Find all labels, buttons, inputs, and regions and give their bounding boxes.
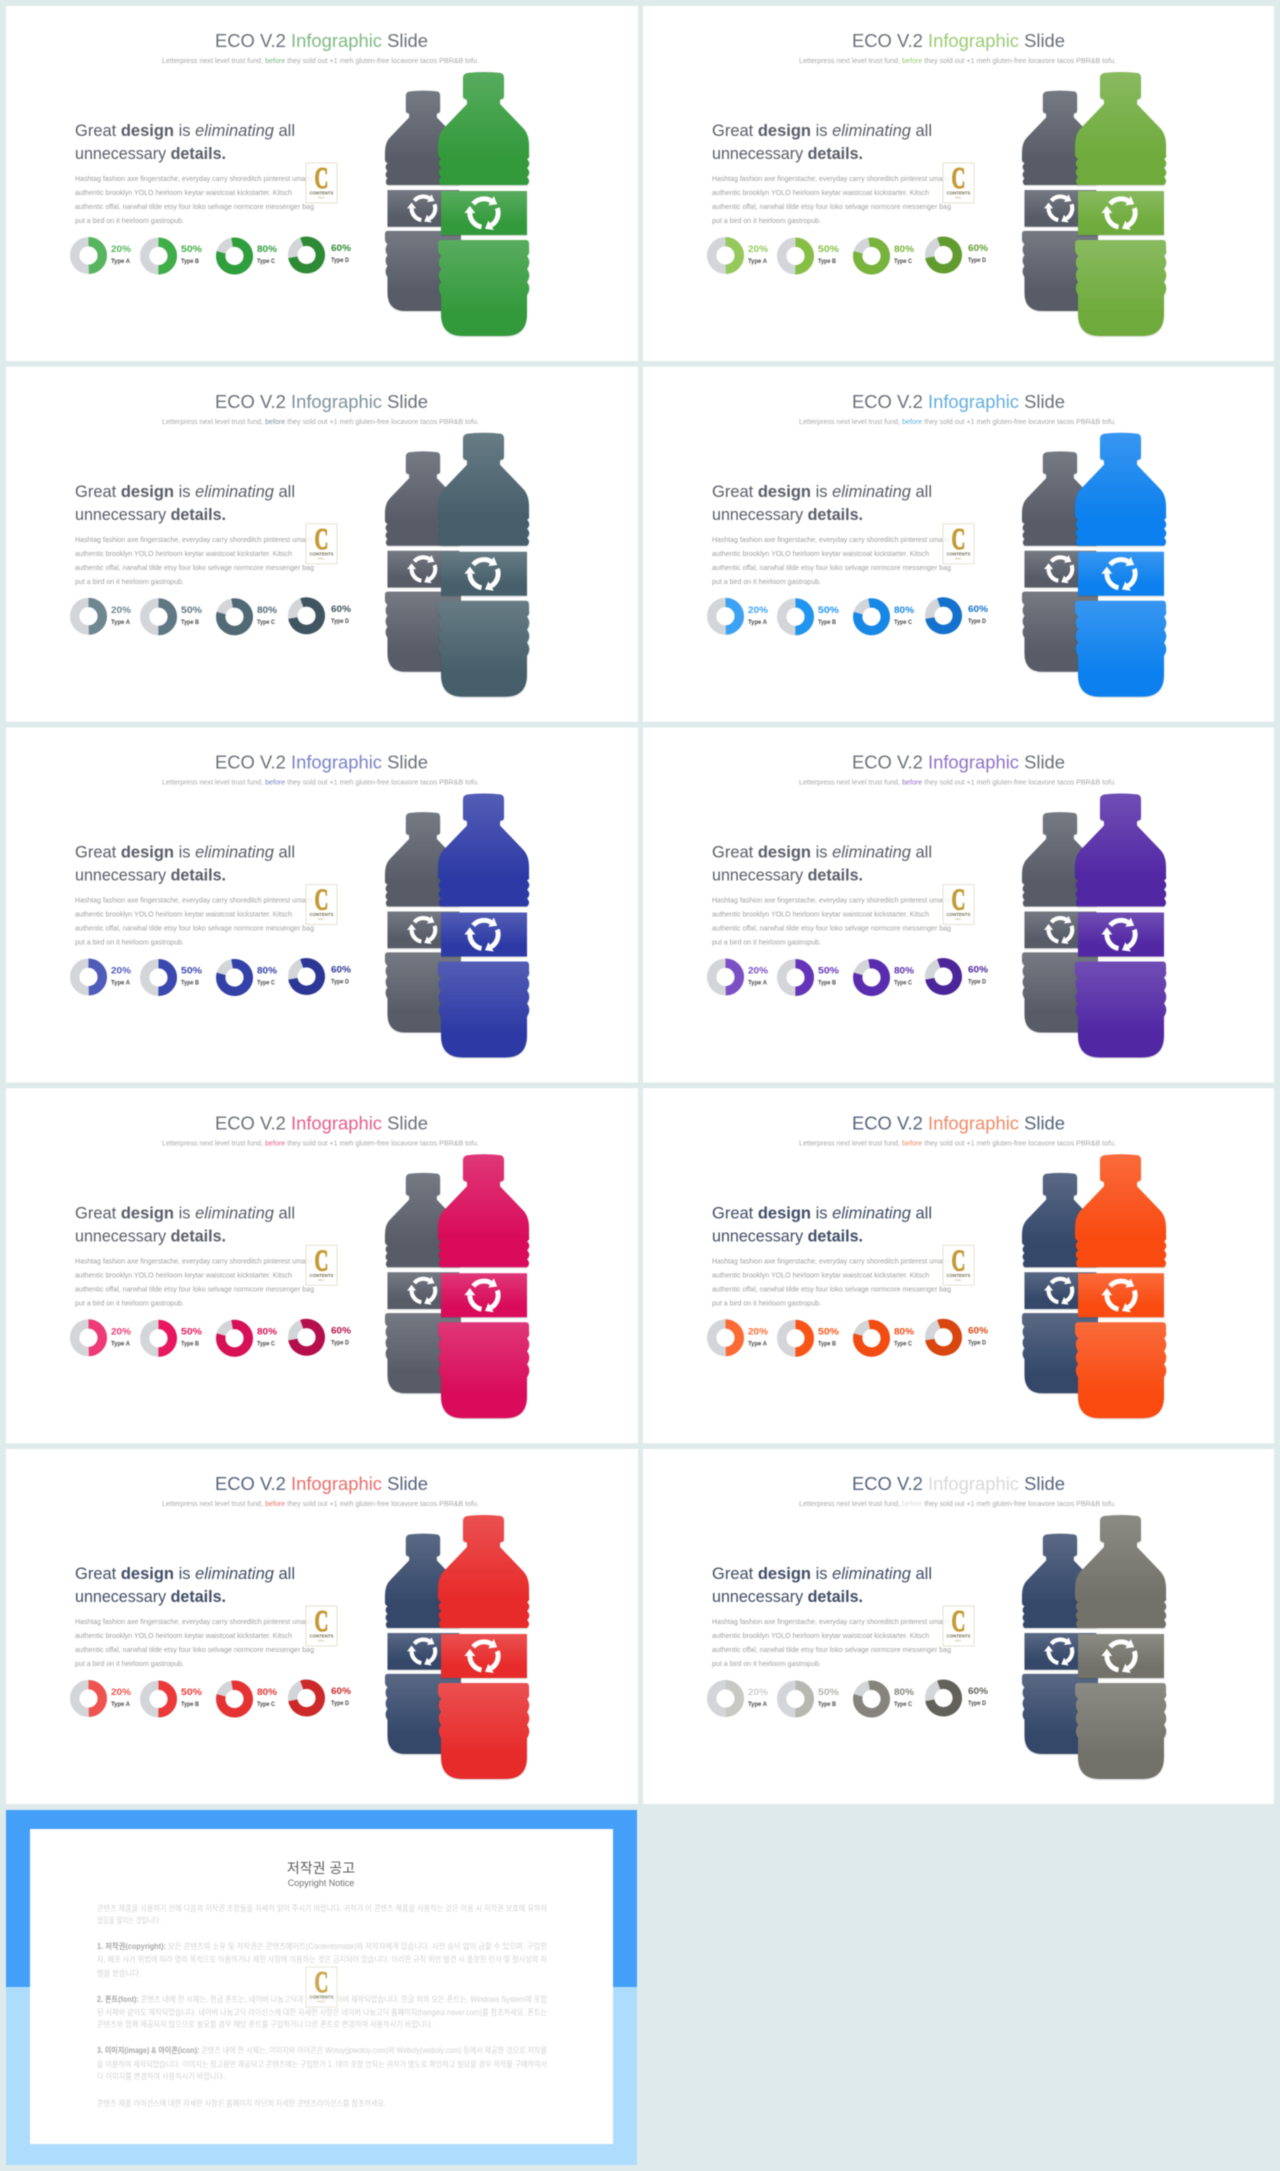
body text: authentic offal, narwhal tilde etsy four loko selvage normcore messenger bag [712, 563, 951, 572]
title: ECO V.2 Infographic Slide [215, 1112, 428, 1133]
heading: unnecessary details. [712, 505, 863, 524]
donut: type C [219, 1322, 278, 1354]
donut: type D: 60% [331, 604, 352, 615]
donut: type A [75, 1685, 132, 1712]
heading: unnecessary details. [712, 1587, 863, 1606]
body text: authentic brooklyn YOLO heirloom keytar waistcoat kickstarter. Kitsch [712, 1270, 929, 1279]
donut: type D: 60% [968, 964, 989, 976]
donut: type B [145, 1685, 203, 1713]
donut: type C: Type C [257, 980, 275, 986]
title: ECO V.2 Infographic Slide [215, 30, 428, 51]
donut: type A: 20% [748, 244, 769, 255]
donut: type C: 80% [894, 244, 915, 255]
subtitle: Letterpress next level trust fund, before they sold out +1 meh gluten-free locavore tacos PBR&B tofu. [162, 1499, 479, 1508]
donut: type B [145, 1324, 203, 1352]
title: ECO V.2 Infographic Slide [852, 1112, 1065, 1133]
heading [712, 482, 932, 524]
logo stamp [943, 1243, 974, 1285]
heading: unnecessary details. [712, 866, 863, 884]
donut: type D: Type D [331, 1339, 349, 1346]
donut: type D: Type D [331, 978, 349, 986]
icon: back bottle [1022, 451, 1098, 672]
logo stamp [306, 882, 337, 924]
donut: type C: Type C [894, 258, 912, 265]
donut: type D: Type D [968, 1339, 986, 1346]
donut: type B: Type B [181, 619, 199, 626]
donut: type A [712, 242, 769, 269]
font paragraph: 된 서체와 같이도 제작되었습니다. 네이버 나눔고딕 라이선스에 대한 자세한 사항은 네이버 나눔고딕 홈페이지(hangeul.naver.com)를 참조하세요. 폰트는 [97, 2007, 547, 2017]
heading: Great design is eliminating all [712, 1564, 932, 1583]
icon: back bottle [1022, 812, 1098, 1033]
body text: Hashtag fashion axe fingerstache, everyday carry shoreditch pinterest umami [712, 1256, 950, 1265]
subtitle: Letterpress next level trust fund, before they sold out +1 meh gluten-free locavore tacos PBR&B tofu. [162, 1138, 479, 1147]
heading: Great design is eliminating all [75, 1564, 295, 1583]
heading: Great design is eliminating all [712, 842, 932, 862]
icon: front bottle [438, 72, 529, 336]
heading: Great design is eliminating all [712, 1203, 932, 1222]
donut: type A: Type A [111, 1701, 130, 1708]
body text [712, 535, 951, 586]
panel: blue slide [643, 367, 1274, 722]
donut: type C: 80% [894, 1326, 915, 1337]
donut: type A [712, 1324, 769, 1352]
logo stamp [306, 521, 337, 564]
donut: type B: Type B [818, 980, 836, 986]
body text: authentic offal, narwhal tilde etsy four loko selvage normcore messenger bag [712, 202, 951, 211]
donut: type A: 20% [111, 244, 132, 255]
donut: type A: 20% [748, 1326, 769, 1337]
icon: back bottle [1022, 1173, 1098, 1393]
donut: type D [926, 959, 989, 994]
icon: back bottle [385, 91, 461, 311]
body text: Hashtag fashion axe fingerstache, everyday carry shoreditch pinterest umami [712, 896, 950, 904]
body text: authentic brooklyn YOLO heirloom keytar waistcoat kickstarter. Kitsch [75, 1270, 292, 1279]
donut: type C [856, 1683, 915, 1715]
subtitle: Letterpress next level trust fund, before they sold out +1 meh gluten-free locavore tacos PBR&B tofu. [162, 778, 479, 786]
donut: type C [856, 240, 915, 272]
donut: type B [145, 242, 203, 270]
body text: authentic offal, narwhal tilde etsy four loko selvage normcore messenger bag [75, 1645, 314, 1654]
panel: gray slide [643, 1449, 1274, 1804]
heading [712, 842, 932, 884]
donut: type A: Type A [748, 619, 767, 626]
panel: slate slide [6, 367, 638, 722]
font paragraph: 2. 폰트(font): 콘텐츠 내에 한 서체는, 한글 폰트는, 네이버 나눔고딕과 서체 및 네이버 제작되었습니다. 한글 외의 모든 폰트는, Windows System에 포함 [97, 1994, 548, 2004]
icon: back bottle [385, 1534, 461, 1754]
donut: type D [926, 237, 989, 273]
icon: front bottle [438, 1154, 529, 1418]
icon: front bottle [1075, 1154, 1166, 1418]
title: ECO V.2 Infographic Slide [852, 1473, 1065, 1494]
subtitle: Letterpress next level trust fund, before they sold out +1 meh gluten-free locavore tacos PBR&B tofu. [162, 417, 479, 426]
panel: orange slide [643, 1088, 1274, 1443]
donut: type A: Type A [748, 258, 767, 265]
copyright paragraph: 1. 저작권(copyright): 모든 콘텐츠의 소유 및 저작권은 콘텐츠메이트(Contentsmate)와 저작자에게 있습니다. 사전 승낙 없이 급할 수 있으며, 구입한 [97, 1941, 548, 1951]
donut: type D: 60% [331, 1686, 352, 1697]
body text: authentic brooklyn YOLO heirloom keytar waistcoat kickstarter. Kitsch [712, 1631, 929, 1640]
donut: type D: 60% [968, 1686, 989, 1697]
donut: type A [712, 963, 769, 991]
donut: type D: Type D [968, 1700, 986, 1707]
donut: type C: Type C [894, 980, 912, 986]
donut: type B: 50% [181, 966, 203, 976]
body text: Hashtag fashion axe fingerstache, everyday carry shoreditch pinterest umami [75, 1256, 313, 1265]
body text [75, 896, 314, 946]
donut: type C: Type C [894, 1701, 912, 1708]
subtitle: Letterpress next level trust fund, before they sold out +1 meh gluten-free locavore tacos PBR&B tofu. [799, 417, 1116, 426]
body text: authentic brooklyn YOLO heirloom keytar waistcoat kickstarter. Kitsch [712, 549, 929, 558]
icon: back bottle [1022, 1534, 1098, 1754]
donut: type C: Type C [894, 619, 912, 626]
donut: type B: Type B [181, 258, 199, 265]
title: ECO V.2 Infographic Slide [215, 1473, 428, 1494]
copyright paragraph [97, 1941, 548, 1978]
body text [712, 1617, 951, 1668]
subtitle: Letterpress next level trust fund, before they sold out +1 meh gluten-free locavore tacos PBR&B tofu. [799, 1138, 1116, 1147]
body text: Hashtag fashion axe fingerstache, everyday carry shoreditch pinterest umami [75, 1617, 313, 1626]
donut: type C: 80% [257, 244, 278, 255]
donut: type B: Type B [818, 1701, 836, 1708]
donut: type D: Type D [968, 618, 986, 625]
donut: type A: Type A [111, 980, 130, 986]
panel: light green slide [643, 6, 1274, 361]
heading: Great design is eliminating all [75, 482, 295, 501]
donut: type A: Type A [748, 1701, 767, 1708]
donut: type B [145, 964, 203, 991]
donut: type C [219, 240, 278, 272]
font paragraph [97, 1994, 548, 2029]
intro paragraph: 콘텐츠 제품을 사용하기 전에 다음의 저작권 조항들을 자세히 읽어 주시기 바랍니다. 귀하가 이 콘텐츠 제품을 사용하는 것은 이용 시 저작권 보호에 유의하 [97, 1903, 548, 1913]
donut: type B: Type B [818, 619, 836, 626]
donut: type C: Type C [257, 258, 275, 265]
heading: unnecessary details. [75, 144, 226, 163]
donut: type B: 50% [181, 605, 203, 616]
donut: type C: 80% [257, 1687, 278, 1698]
donut: type B [782, 242, 840, 270]
body text: put a bird on it heirloom gastropub. [75, 577, 184, 586]
icon: front bottle [1075, 794, 1166, 1058]
heading: Great design is eliminating all [712, 482, 932, 501]
heading: unnecessary details. [75, 505, 226, 524]
subtitle: Letterpress next level trust fund, before they sold out +1 meh gluten-free locavore tacos PBR&B tofu. [799, 778, 1116, 786]
donut: type D [289, 237, 352, 273]
heading: unnecessary details. [75, 866, 226, 884]
donut: type D [289, 598, 352, 633]
donut: type D [926, 1320, 989, 1355]
heading: Great design is eliminating all [75, 1203, 295, 1222]
donut: type D: Type D [331, 257, 349, 264]
panel: purple slide [643, 728, 1274, 1082]
body text [75, 174, 314, 225]
donut: type D: Type D [331, 1700, 349, 1707]
donut: type C: Type C [894, 1340, 912, 1347]
donut: type C: 80% [894, 1687, 915, 1698]
image and icon paragraph: 다 이미지를 변경하여 사용하시기 바랍니다. [97, 2071, 225, 2081]
body text: authentic brooklyn YOLO heirloom keytar waistcoat kickstarter. Kitsch [712, 910, 929, 918]
heading: Great design is eliminating all [75, 842, 295, 862]
icon: back bottle [385, 1173, 461, 1393]
icon: front bottle [438, 794, 529, 1058]
donut: type B: 50% [181, 244, 203, 255]
body text: put a bird on it heirloom gastropub. [712, 1298, 821, 1307]
copyright paragraph: 자, 배포 사가 위법에 따라 영리 목적으로 이용하거나 제한 사항에 이용하는 것은 금지되어 있습니다. 이러한 규칙 위반 발견 시 충분한 민사 및 형사상의 처 [97, 1954, 547, 1964]
donut: type A [75, 602, 132, 630]
body text: authentic brooklyn YOLO heirloom keytar waistcoat kickstarter. Kitsch [712, 188, 929, 197]
donut: type B: Type B [181, 980, 199, 986]
icon: front bottle [438, 433, 529, 697]
intro paragraph: 셨음을 알리는 것입니다. [97, 1915, 161, 1925]
donut: type D: 60% [968, 243, 989, 254]
body text [712, 1256, 951, 1307]
donut: type B: 50% [818, 244, 840, 255]
heading: unnecessary details. [712, 1226, 863, 1245]
body text: put a bird on it heirloom gastropub. [712, 1659, 821, 1668]
body text: put a bird on it heirloom gastropub. [712, 216, 821, 225]
heading: Great design is eliminating all [75, 121, 295, 140]
icon: front bottle [438, 1515, 529, 1779]
body text: Hashtag fashion axe fingerstache, everyday carry shoreditch pinterest umami [712, 1617, 950, 1626]
heading: unnecessary details. [75, 1587, 226, 1606]
body text: Hashtag fashion axe fingerstache, everyday carry shoreditch pinterest umami [712, 174, 950, 183]
donut: type D: Type D [968, 257, 986, 264]
body text: authentic offal, narwhal tilde etsy four loko selvage normcore messenger bag [75, 924, 314, 932]
donut: type D: Type D [968, 978, 986, 986]
body text [75, 535, 314, 586]
copyright subtitle: Copyright Notice [288, 1878, 354, 1888]
title: ECO V.2 Infographic Slide [215, 752, 428, 772]
donut: type A: Type A [111, 619, 130, 626]
panel: pink slide [6, 1088, 638, 1443]
title: ECO V.2 Infographic Slide [852, 391, 1065, 412]
donut: type D: Type D [331, 618, 349, 625]
donut: type C: 80% [257, 966, 278, 976]
body text: put a bird on it heirloom gastropub. [712, 938, 821, 946]
subtitle: Letterpress next level trust fund, before they sold out +1 meh gluten-free locavore tacos PBR&B tofu. [799, 56, 1116, 65]
body text: Hashtag fashion axe fingerstache, everyday carry shoreditch pinterest umami [75, 535, 313, 544]
body text: authentic offal, narwhal tilde etsy four loko selvage normcore messenger bag [712, 1645, 951, 1654]
donut: type B: 50% [818, 1687, 840, 1698]
donut: type A: 20% [748, 966, 769, 976]
copyright paragraph: 벌을 받습니다. [97, 1968, 141, 1978]
donut: type C [219, 1683, 278, 1715]
heading: unnecessary details. [712, 144, 863, 163]
donut: type D [289, 1680, 352, 1716]
body text: authentic offal, narwhal tilde etsy four loko selvage normcore messenger bag [712, 924, 951, 932]
donut: type B: 50% [818, 966, 840, 976]
logo stamp [943, 521, 974, 564]
logo stamp [943, 1603, 974, 1646]
donut: type D [926, 1680, 989, 1716]
logo stamp [306, 1603, 337, 1646]
body text: authentic brooklyn YOLO heirloom keytar waistcoat kickstarter. Kitsch [75, 910, 292, 918]
heading [712, 1203, 932, 1245]
donut: type B [145, 603, 203, 631]
donut: type A [75, 963, 132, 991]
body text [75, 1617, 314, 1668]
donut: type B: Type B [818, 1340, 836, 1347]
donut: type B: Type B [818, 258, 836, 265]
donut: type C [856, 962, 915, 993]
body text: put a bird on it heirloom gastropub. [75, 1659, 184, 1668]
donut: type A: Type A [748, 980, 767, 986]
donut: type B [782, 1324, 840, 1352]
body text: authentic offal, narwhal tilde etsy four loko selvage normcore messenger bag [75, 563, 314, 572]
donut: type C: 80% [894, 605, 915, 616]
heading [712, 121, 932, 163]
body text: Hashtag fashion axe fingerstache, everyday carry shoreditch pinterest umami [75, 174, 313, 183]
body text: Hashtag fashion axe fingerstache, everyday carry shoreditch pinterest umami [75, 896, 313, 904]
panel: green slide [6, 6, 638, 361]
donut: type D: 60% [331, 243, 352, 254]
donut: type D [926, 598, 989, 633]
logo stamp [306, 1243, 337, 1285]
donut: type C: 80% [257, 1326, 278, 1337]
copyright title: 저작권 공고 [287, 1860, 355, 1876]
donut: type A: 20% [748, 605, 769, 616]
donut: type C [219, 601, 278, 633]
icon: front bottle [1075, 433, 1166, 697]
donut: type C [856, 601, 915, 633]
icon: back bottle [1022, 91, 1098, 311]
title: ECO V.2 Infographic Slide [215, 391, 428, 412]
icon: front bottle [1075, 72, 1166, 336]
image and icon paragraph: 3. 이미지(image) & 아이콘(icon): 콘텐츠 내에 한 서체는, 이미지와 아이콘은 Wotoy(jpwotoy.com)와 Weboly(weboly.com) 등에서 제공한 것으로 저작물 [97, 2045, 547, 2055]
body text: Hashtag fashion axe fingerstache, everyday carry shoreditch pinterest umami [712, 535, 950, 544]
logo stamp [943, 160, 974, 203]
body text: authentic offal, narwhal tilde etsy four loko selvage normcore messenger bag [712, 1284, 951, 1293]
heading [75, 482, 295, 524]
donut: type B: Type B [181, 1340, 199, 1347]
donut: type A: 20% [111, 605, 132, 616]
heading [75, 842, 295, 884]
font paragraph: 콘텐츠와 함께 제공되지 않으므로 필요할 경우 해당 폰트를 구입하거나 다른 폰트로 변경하여 사용하시기 바랍니다. [97, 2019, 433, 2029]
body text [75, 1256, 314, 1307]
donut: type B: 50% [818, 1326, 840, 1337]
donut: type A: Type A [748, 1340, 767, 1347]
donut: type B: 50% [181, 1326, 203, 1337]
body text [712, 174, 951, 225]
donut: type C: Type C [257, 1701, 275, 1708]
donut: type C [856, 1322, 915, 1354]
logo stamp [306, 160, 337, 203]
donut: type A [75, 1324, 132, 1352]
donut: type B: Type B [181, 1701, 199, 1708]
icon: back bottle [385, 812, 461, 1033]
donut: type A: 20% [748, 1687, 769, 1698]
body text: authentic brooklyn YOLO heirloom keytar waistcoat kickstarter. Kitsch [75, 188, 292, 197]
panel: copyright notice [6, 1810, 637, 2165]
body text: put a bird on it heirloom gastropub. [75, 216, 184, 225]
donut: type A: 20% [111, 1687, 132, 1698]
donut: type D: 60% [968, 604, 989, 615]
body text [712, 896, 951, 946]
donut: type A: Type A [111, 1340, 130, 1347]
body text: put a bird on it heirloom gastropub. [712, 577, 821, 586]
donut: type C: 80% [894, 966, 915, 976]
closing line: 콘텐츠 제품 라이선스에 대한 자세한 사항은 홈페이지 하단의 자세한 콘텐츠라이선스를 참조하세요. [97, 2098, 386, 2108]
body text: put a bird on it heirloom gastropub. [75, 938, 184, 946]
subtitle: Letterpress next level trust fund, before they sold out +1 meh gluten-free locavore tacos PBR&B tofu. [799, 1499, 1116, 1508]
donut: type D: 60% [331, 964, 352, 976]
heading [75, 1203, 295, 1245]
donut: type A [712, 602, 769, 630]
icon: front bottle [1075, 1515, 1166, 1779]
body text: put a bird on it heirloom gastropub. [75, 1298, 184, 1307]
donut: type D: 60% [331, 1325, 352, 1336]
donut: type B: 50% [818, 605, 840, 616]
donut: type A: 20% [111, 1326, 132, 1337]
heading [712, 1564, 932, 1606]
intro paragraph [97, 1903, 548, 1925]
donut: type A: Type A [111, 258, 130, 265]
heading [75, 1564, 295, 1606]
donut: type D: 60% [968, 1325, 989, 1336]
donut: type A [75, 242, 132, 269]
body text: authentic brooklyn YOLO heirloom keytar waistcoat kickstarter. Kitsch [75, 549, 292, 558]
panel: red slide [6, 1449, 638, 1804]
donut: type D [289, 959, 352, 994]
image and icon paragraph: 을 이용하여 제작되었습니다. 이미지는 참고용만 제공되고 콘텐츠에는 구입한가 1. 데이 포함 안되는 귀하가 별도로 확인하고 필요할 경우 저작물 구매하여서 [97, 2059, 547, 2069]
donut: type A [712, 1685, 769, 1712]
logo stamp [943, 882, 974, 924]
donut: type C: 80% [257, 605, 278, 616]
donut: type C [219, 962, 278, 993]
heading: Great design is eliminating all [712, 121, 932, 140]
heading [75, 121, 295, 163]
body text: authentic offal, narwhal tilde etsy four loko selvage normcore messenger bag [75, 1284, 314, 1293]
donut: type B [782, 1685, 840, 1713]
heading: unnecessary details. [75, 1226, 226, 1245]
donut: type B [782, 603, 840, 631]
donut: type C: Type C [257, 1340, 275, 1347]
donut: type B [782, 964, 840, 991]
body text: authentic brooklyn YOLO heirloom keytar waistcoat kickstarter. Kitsch [75, 1631, 292, 1640]
logo stamp [306, 1964, 337, 2007]
donut: type B: 50% [181, 1687, 203, 1698]
image and icon paragraph [97, 2045, 547, 2081]
subtitle: Letterpress next level trust fund, before they sold out +1 meh gluten-free locavore tacos PBR&B tofu. [162, 56, 479, 65]
donut: type A: 20% [111, 966, 132, 976]
body text: authentic offal, narwhal tilde etsy four loko selvage normcore messenger bag [75, 202, 314, 211]
panel: indigo slide [6, 728, 638, 1082]
title: ECO V.2 Infographic Slide [852, 752, 1065, 772]
donut: type D [289, 1320, 352, 1355]
donut: type C: Type C [257, 619, 275, 626]
icon: back bottle [385, 451, 461, 672]
title: ECO V.2 Infographic Slide [852, 30, 1065, 51]
